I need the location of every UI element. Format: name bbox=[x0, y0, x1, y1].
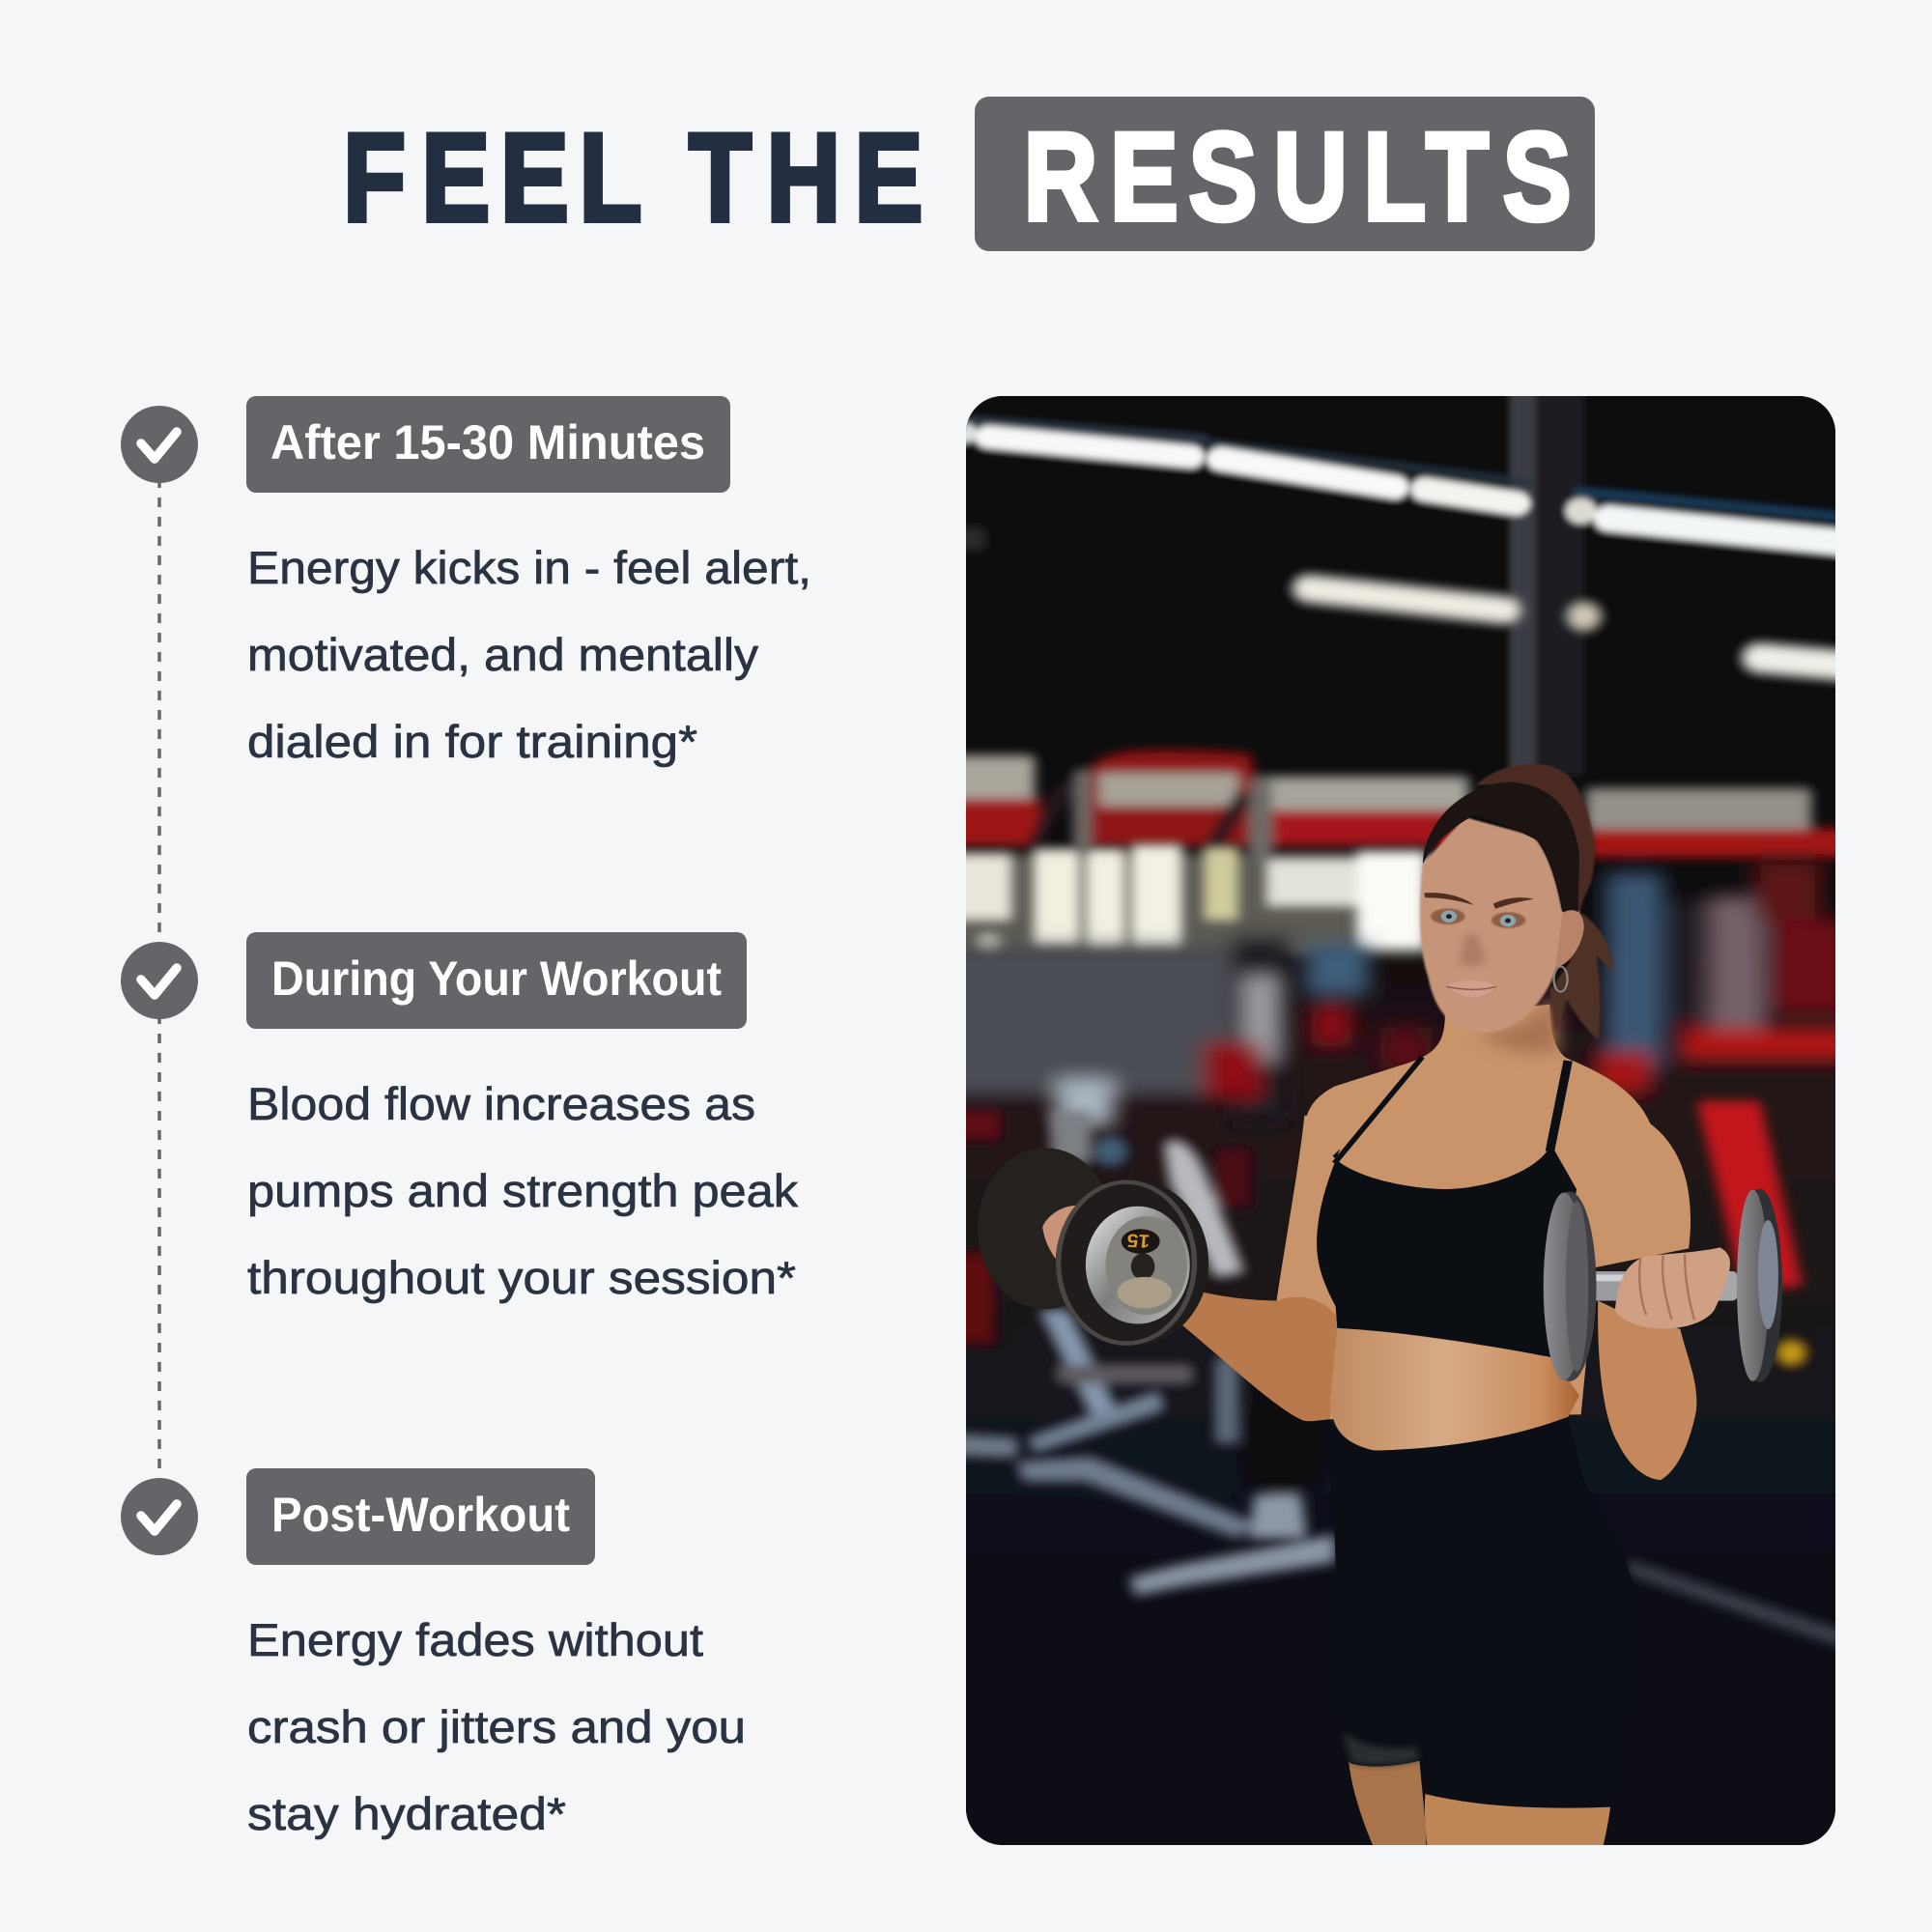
step 1 label: After 15-30 Minutes bbox=[270, 415, 705, 469]
step 2 description: Blood flow increases as bbox=[247, 1078, 755, 1129]
step 1 bbox=[121, 396, 811, 767]
icon: check circle bbox=[121, 406, 198, 483]
person: neck and shoulders bbox=[1304, 990, 1653, 1131]
step 3 label bbox=[246, 1468, 595, 1565]
timeline connector: step 2 to 3 bbox=[157, 1014, 161, 1488]
dumbbell: right hand bbox=[1543, 1189, 1782, 1382]
abdomen bbox=[1330, 1326, 1579, 1451]
title highlight pill bbox=[975, 97, 1595, 251]
step 1 description: motivated, and mentally bbox=[247, 629, 759, 680]
right hand bbox=[1615, 1247, 1730, 1328]
hair bbox=[1423, 782, 1579, 912]
title text: results: RESULTS bbox=[1023, 106, 1572, 247]
ceiling, pillar and lights bbox=[966, 396, 1835, 779]
step 2 label: During Your Workout bbox=[271, 952, 722, 1006]
icon: check circle bbox=[121, 1478, 198, 1555]
neck shadow bbox=[1476, 990, 1558, 1053]
right forearm bbox=[1598, 1300, 1696, 1480]
gym background (soft focus) bbox=[966, 396, 1835, 1845]
bra straps bbox=[1334, 1057, 1568, 1163]
step 2 bbox=[121, 932, 799, 1303]
person: lifted body bbox=[978, 1116, 1782, 1851]
step 3 bbox=[121, 1468, 746, 1839]
step 3 description: crash or jitters and you bbox=[247, 1701, 746, 1752]
step 1 description: dialed in for training* bbox=[247, 716, 697, 767]
photo panel: woman lifting dumbbells in gym bbox=[966, 396, 1835, 1845]
step 1 description: Energy kicks in - feel alert, bbox=[247, 542, 811, 593]
step 3 description bbox=[247, 1614, 746, 1839]
red banners and bright windows bbox=[932, 751, 1885, 1126]
person: head bbox=[1334, 764, 1613, 1163]
dumbbell weight number: 15 bbox=[1126, 1230, 1151, 1251]
step 3 label: Post-Workout bbox=[271, 1488, 570, 1542]
step 2 description: throughout your session* bbox=[247, 1252, 796, 1303]
step 3 description: Energy fades without bbox=[247, 1614, 703, 1665]
step 2 description bbox=[247, 1078, 799, 1303]
shorts bbox=[1330, 1417, 1639, 1808]
dumbbell: left hand bbox=[978, 1148, 1208, 1347]
shorts sheen bbox=[1343, 1732, 1418, 1765]
step 1 description bbox=[247, 542, 811, 767]
ponytail bbox=[1476, 764, 1613, 1039]
title bbox=[343, 97, 1595, 251]
sports bra bbox=[1317, 1144, 1577, 1357]
step 2 description: pumps and strength peak bbox=[247, 1165, 799, 1216]
step 1 label bbox=[246, 396, 730, 493]
torso and shoulders bbox=[1277, 1116, 1690, 1419]
legs bbox=[1349, 1761, 1611, 1851]
earring bbox=[1554, 967, 1568, 992]
title text: feel the: FEEL THE bbox=[343, 107, 923, 248]
face bbox=[1420, 817, 1579, 1033]
facial features bbox=[1424, 893, 1534, 997]
bench and floor bbox=[944, 1101, 1873, 1657]
ear bbox=[1555, 910, 1584, 967]
step 3 description: stay hydrated* bbox=[247, 1788, 566, 1839]
timeline connector: step 1 to 2 bbox=[157, 478, 161, 952]
left forearm bbox=[1180, 1287, 1339, 1421]
icon: check circle bbox=[121, 942, 198, 1019]
step 2 label bbox=[246, 932, 747, 1029]
